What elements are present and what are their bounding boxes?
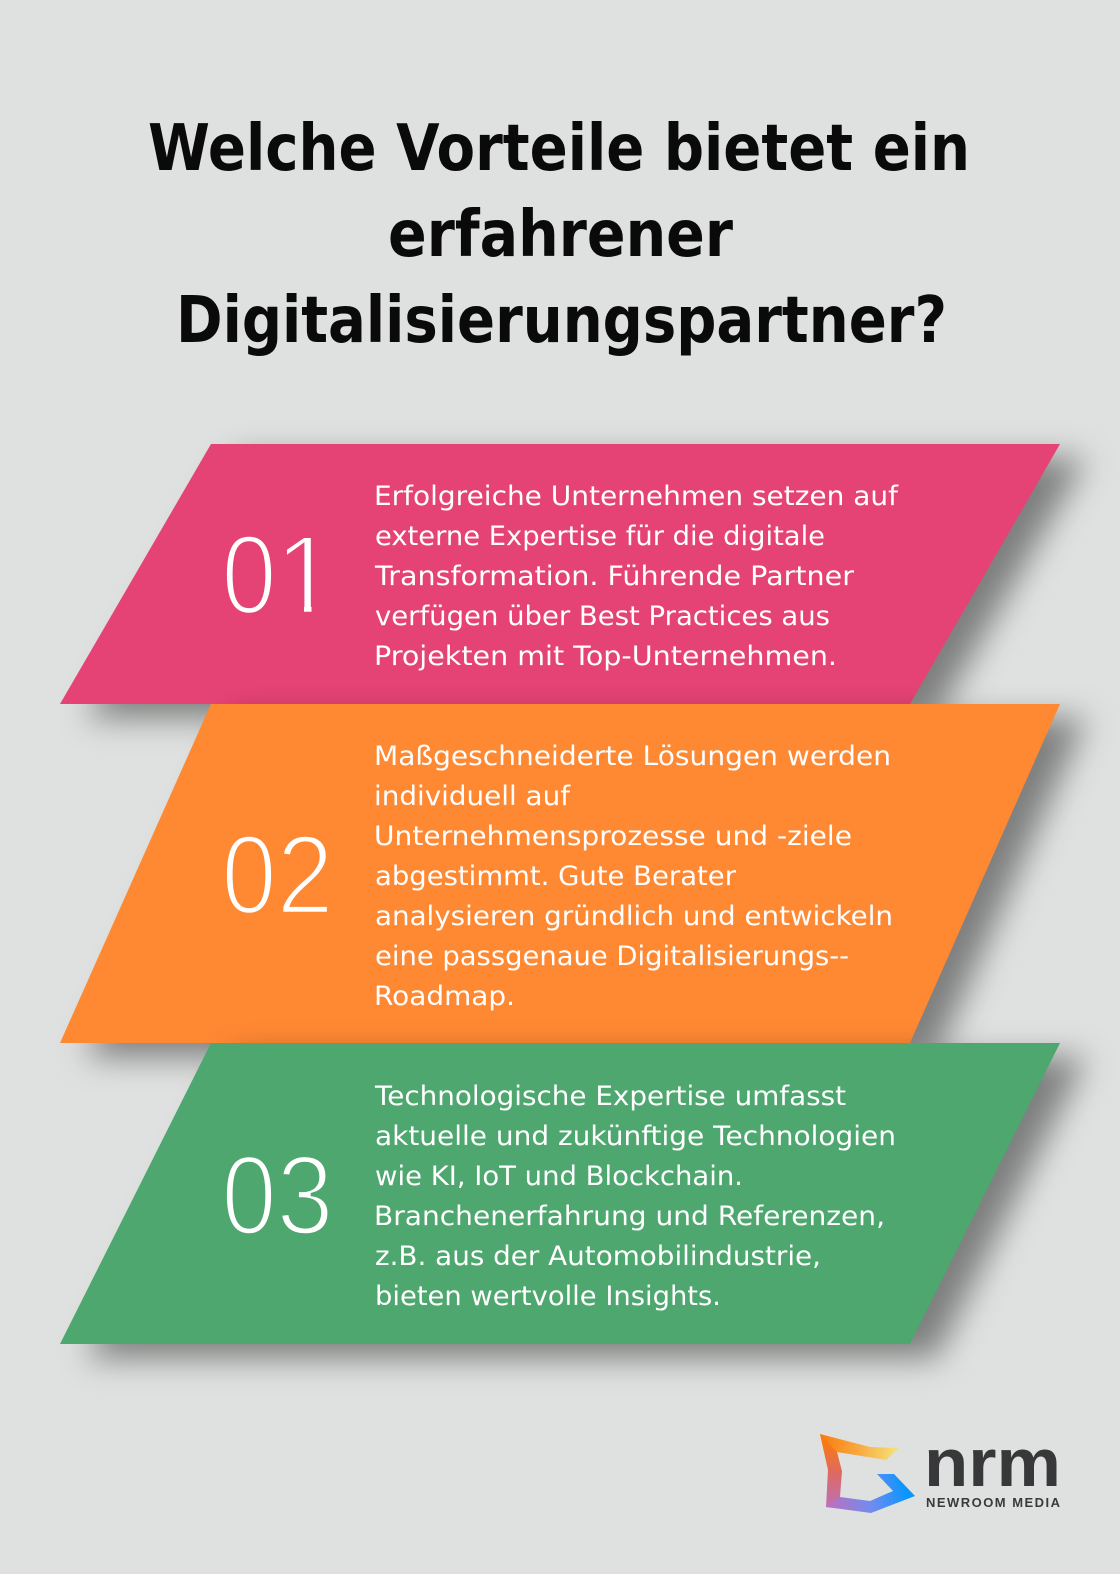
text: step 02: abgestimmt. Gute Berater: [375, 861, 736, 892]
text: step 02: individuell auf: [374, 781, 571, 812]
text: step 02: [374, 741, 893, 1012]
text: step 02: analysieren gründlich und entwickeln: [375, 901, 893, 932]
text: step 02: Roadmap.: [374, 981, 515, 1012]
text: step 02: eine passgenaue Digitalisierungs--: [375, 941, 849, 972]
number 01: [226, 536, 312, 613]
text: step 03: aktuelle und zukünftige Technologien: [375, 1121, 896, 1152]
text: step 01: verfügen über Best Practices aus: [375, 601, 830, 632]
panel: step 03: [60, 1043, 1086, 1358]
logo tagline: NEWROOM MEDIA: [926, 1495, 1061, 1510]
text: step 01: [374, 481, 899, 672]
text: step 03: Branchenerfahrung und Referenzen,: [374, 1201, 885, 1232]
number 03: [222, 1133, 334, 1258]
text: step 01: Projekten mit Top-Unternehmen.: [374, 641, 837, 672]
band: green parallelogram: [60, 1043, 1060, 1344]
band: orange parallelogram: [60, 704, 1060, 1043]
panel: step 02: [60, 704, 1086, 1057]
text: step 03: z.B. aus der Automobilindustrie,: [375, 1241, 821, 1272]
text: step 01: Erfolgreiche Unternehmen setzen auf: [374, 481, 899, 512]
number 02: 2: [277, 812, 334, 938]
panel: step 01: [60, 444, 1086, 718]
number 01: 0: [222, 512, 276, 638]
band: pink parallelogram: [60, 444, 1060, 704]
icon: logo mark: [820, 1434, 915, 1513]
logo: NRM Newroom Media: [820, 1425, 1061, 1513]
number 02: [222, 812, 334, 938]
text: step 03: wie KI, IoT und Blockchain.: [375, 1161, 743, 1192]
title: Digitalisierungspartner?: [176, 283, 947, 358]
number 03: 0: [222, 1133, 276, 1258]
text: step 01: externe Expertise für die digitale: [375, 521, 825, 552]
title: erfahrener: [388, 197, 733, 272]
text: step 02: Unternehmensprozesse und -ziele: [374, 821, 852, 852]
number 01: 1: [274, 512, 337, 638]
title: [148, 111, 970, 358]
title: Welche Vorteile bietet ein: [148, 111, 970, 186]
text: step 03: [374, 1081, 896, 1312]
text: step 02: Maßgeschneiderte Lösungen werden: [374, 741, 891, 772]
text: step 03: Technologische Expertise umfasst: [374, 1081, 846, 1112]
number 03: 3: [276, 1133, 334, 1258]
logo wordmark: nrm: [924, 1425, 1061, 1501]
text: step 03: bieten wertvolle Insights.: [375, 1281, 721, 1312]
number 02: 0: [222, 812, 276, 938]
text: step 01: Transformation. Führende Partner: [374, 561, 854, 592]
